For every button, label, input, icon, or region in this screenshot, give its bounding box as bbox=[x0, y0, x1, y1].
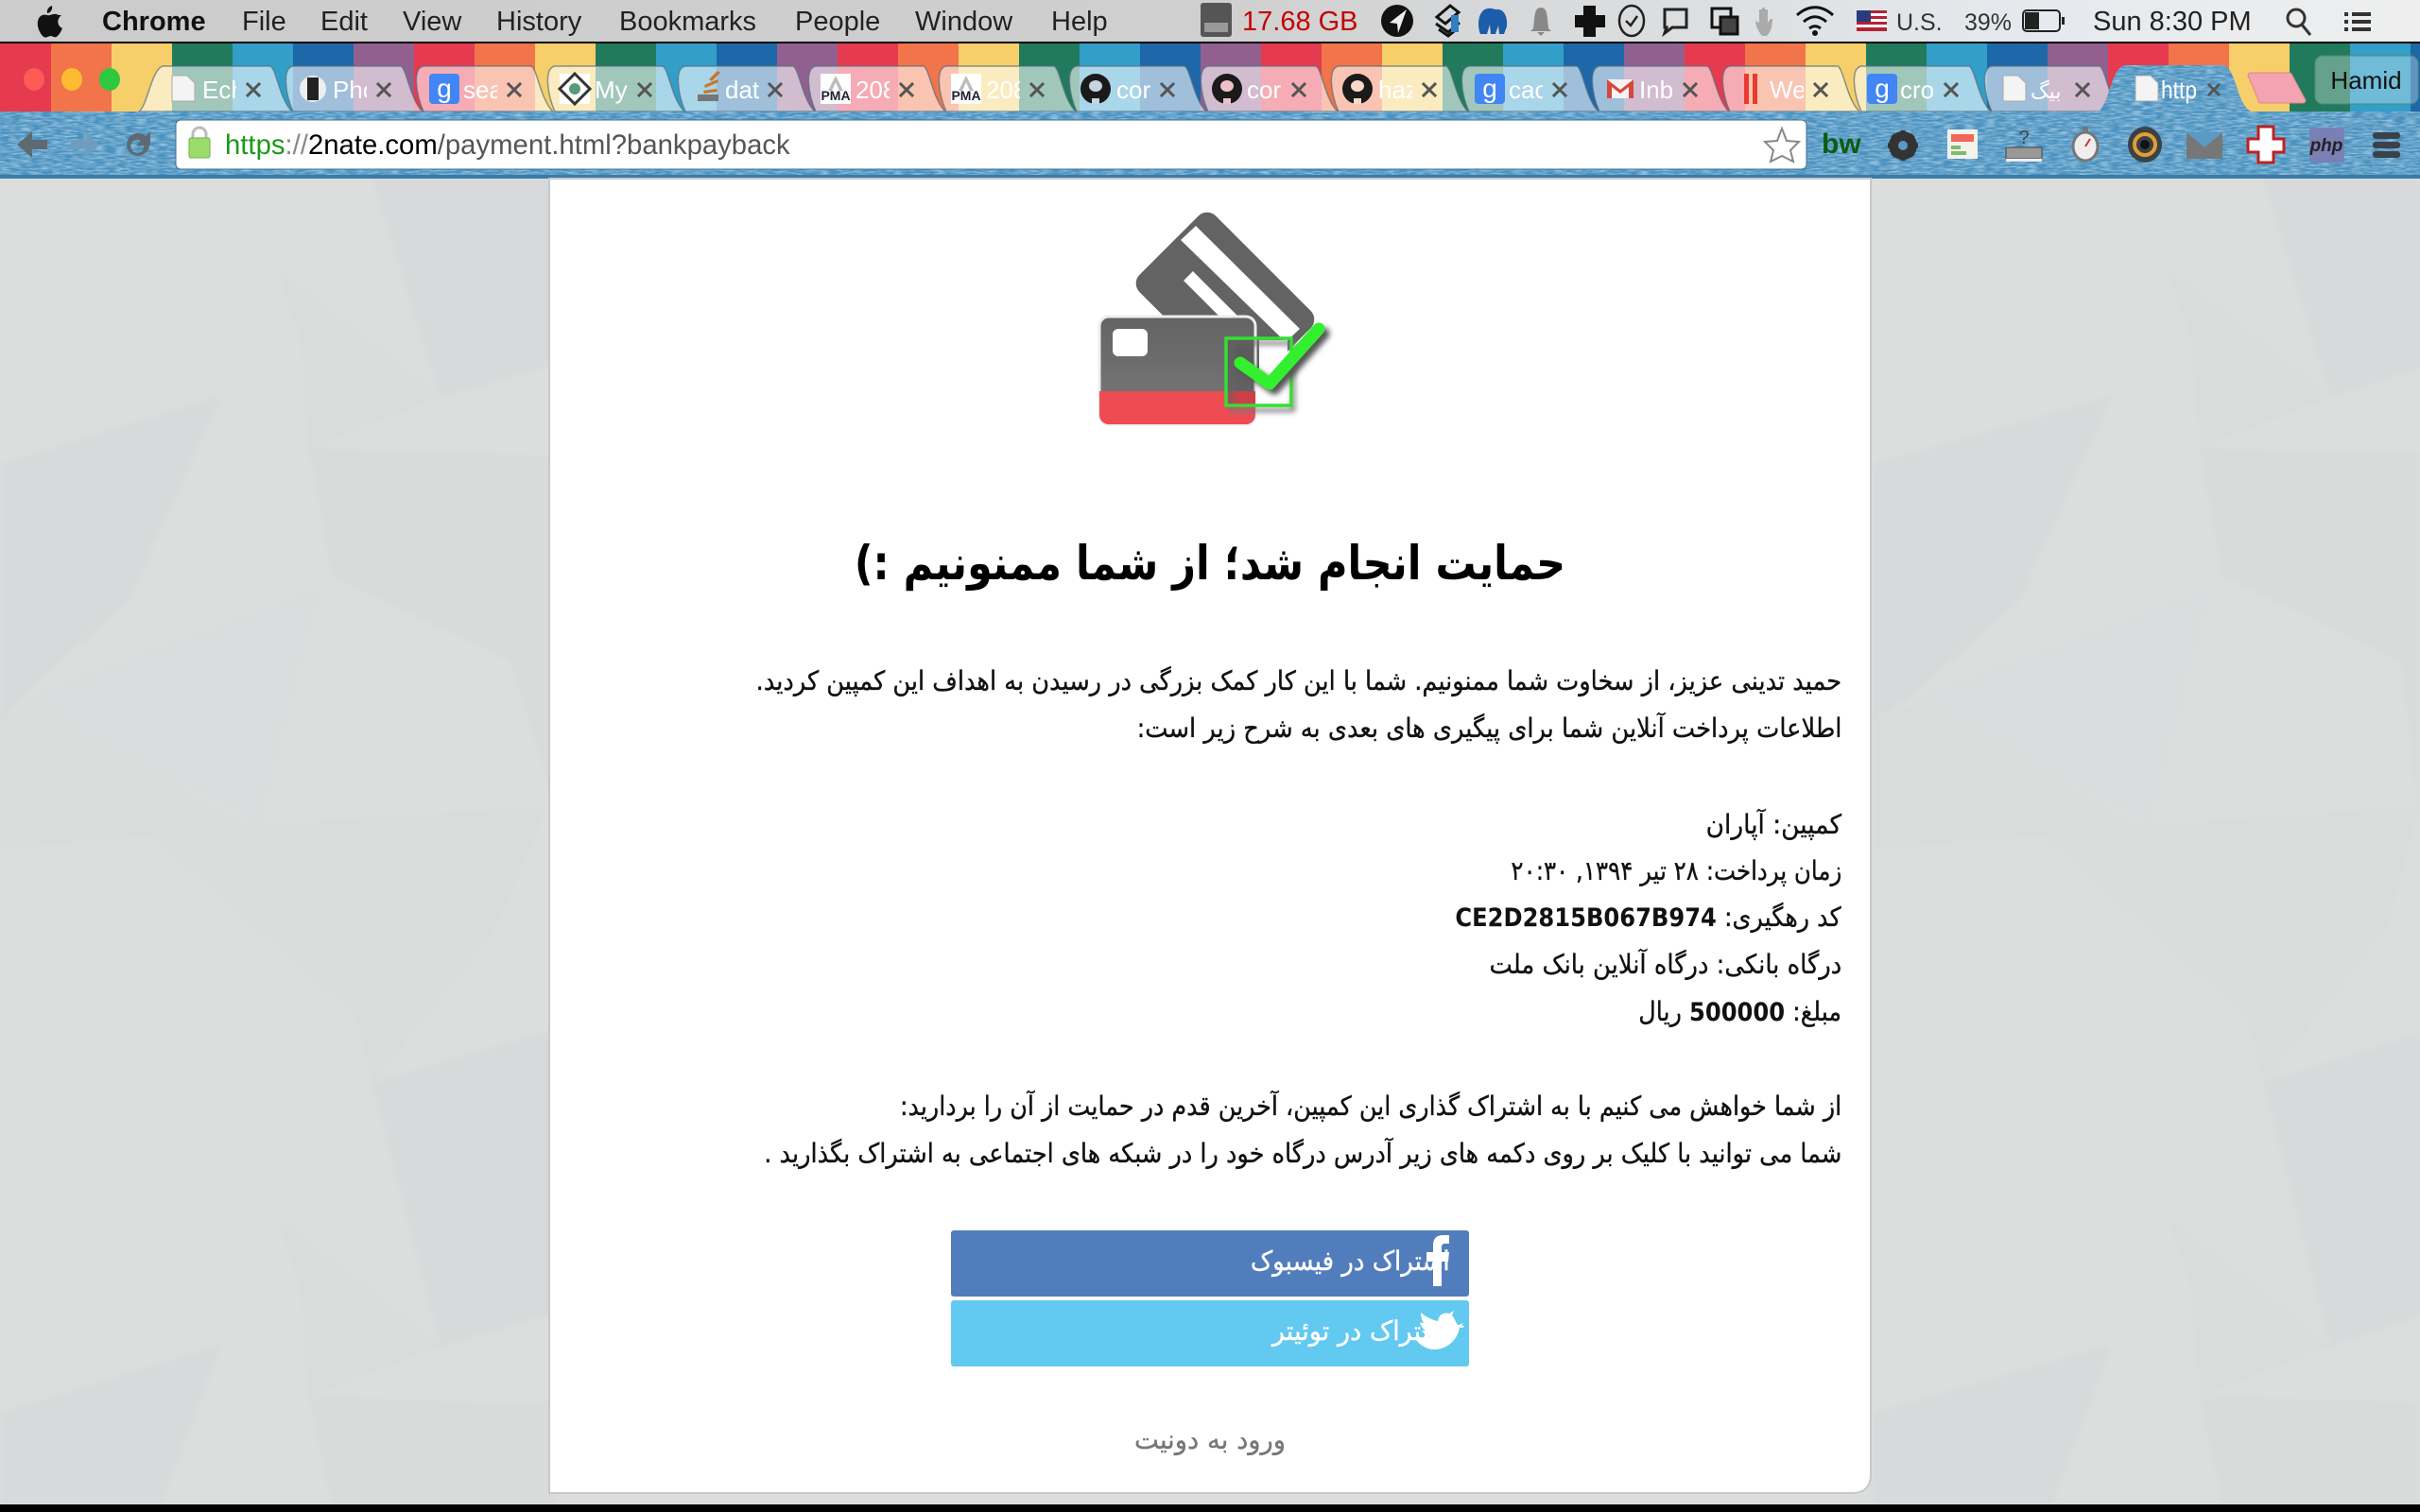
tab favicons: g bbox=[437, 74, 452, 103]
icon: US flag bbox=[1857, 10, 1887, 31]
icon: stopwatch bbox=[2073, 127, 2098, 161]
button: share on twitter bbox=[951, 1300, 1469, 1366]
icon: lens bbox=[2128, 127, 2162, 163]
text: menu items: View bbox=[403, 7, 462, 37]
tab labels: Pho bbox=[333, 76, 376, 104]
active tab favicon bbox=[2135, 76, 2158, 101]
text: disk free: 17.68 GB bbox=[1242, 7, 1358, 37]
rainbow tab strip bbox=[0, 43, 2420, 112]
icon: menu bbox=[2373, 132, 2400, 158]
white content panel bbox=[549, 179, 1871, 1493]
icon: wifi bbox=[1797, 8, 1833, 34]
icon: envelope bbox=[2187, 132, 2222, 159]
white area behind check box bbox=[1259, 340, 1288, 402]
icon: telegram bbox=[1381, 5, 1413, 37]
icon: inbox question: ? bbox=[2018, 128, 2030, 148]
button: share on facebook bbox=[951, 1230, 1469, 1297]
tab labels: We bbox=[1770, 76, 1806, 104]
icon: notification list bbox=[2344, 12, 2371, 31]
tab labels: 208 bbox=[856, 76, 896, 104]
tab row bbox=[139, 66, 2121, 112]
bottom edge bbox=[0, 1504, 2420, 1512]
tab labels: 208 bbox=[986, 76, 1027, 104]
check mark bbox=[1240, 329, 1323, 388]
icon: elephant bbox=[1478, 9, 1507, 34]
tab labels: cor bbox=[1116, 76, 1150, 104]
icon: copy arrows bbox=[1712, 9, 1737, 34]
text: menu items: History bbox=[496, 7, 582, 37]
detail: amount: مبلغ: 500000 ریال bbox=[1638, 996, 1841, 1027]
active tab close bbox=[2208, 84, 2220, 95]
icon: php bbox=[2309, 128, 2344, 163]
detail: tracking code: کد رهگیری: CE2D2815B067B974 bbox=[1456, 902, 1841, 933]
icon: reload bbox=[127, 131, 150, 156]
tab labels bbox=[204, 79, 2060, 104]
icon: gear bbox=[1888, 130, 1918, 161]
detail: payment time: زمان پرداخت: ۲۸ تیر ۱۳۹۴, ۲۰:۳۰ bbox=[1511, 855, 1841, 886]
tab labels: haz bbox=[1378, 76, 1418, 104]
text: menu items: File bbox=[242, 7, 286, 37]
icon: facebook f bbox=[1426, 1235, 1449, 1286]
icon: php: php bbox=[2309, 136, 2342, 156]
heading: حمایت انجام شد؛ از شما ممنونیم :) bbox=[855, 536, 1565, 591]
text: menu items: Bookmarks bbox=[619, 7, 756, 37]
icon: chat bbox=[1665, 9, 1686, 33]
front card bbox=[1099, 317, 1255, 424]
icon: disk bbox=[1201, 3, 1232, 37]
paragraph: info intro: اطلاعات پرداخت آنلاین شما برای پیگیری های بعدی به شرح زیر است: bbox=[1136, 713, 1841, 744]
detail: gateway: درگاه بانکی: درگاه آنلاین بانک ملت bbox=[1489, 949, 1841, 980]
tab favicons bbox=[172, 71, 2026, 104]
icon: forward arrow bbox=[71, 131, 99, 158]
text: status items: 39% bbox=[1964, 9, 2012, 36]
profile button: Hamid bbox=[2330, 66, 2402, 94]
active tab label: http bbox=[2161, 76, 2197, 104]
text: facebook label: اشتراک در فیسبوک bbox=[1251, 1246, 1450, 1277]
text: menu items: People bbox=[795, 7, 880, 37]
text: menu items: Edit bbox=[320, 7, 368, 37]
tab favicons: PMA bbox=[821, 88, 851, 103]
detail: campaign: کمپین: آپاران bbox=[1706, 809, 1841, 840]
extension icons bbox=[1822, 127, 2400, 163]
icon: bell bbox=[1530, 8, 1551, 36]
text: clock: Sun 8:30 PM bbox=[2093, 7, 2252, 37]
toolbar bbox=[0, 65, 2420, 179]
window top edge bbox=[0, 42, 2420, 43]
tab close buttons bbox=[248, 84, 2088, 95]
menu bar bbox=[0, 0, 2420, 42]
profile button bbox=[2315, 56, 2418, 104]
text: menu items: Help bbox=[1051, 7, 1108, 37]
icon: bw: bw bbox=[1822, 129, 1861, 160]
tab favicons: g bbox=[1875, 74, 1890, 103]
icon: clock check bbox=[1619, 6, 1644, 36]
text: status items bbox=[1896, 9, 2012, 36]
address bar bbox=[176, 120, 1806, 169]
icon: red cross bbox=[2248, 127, 2284, 163]
tab labels: dat bbox=[725, 76, 760, 104]
icon: star bbox=[1765, 129, 1799, 162]
window traffic lights bbox=[24, 68, 120, 91]
text: Chrome: Chrome bbox=[102, 7, 206, 37]
tab labels: بیگ bbox=[2031, 79, 2061, 103]
icon: battery bbox=[2023, 10, 2065, 31]
icon: lock bbox=[189, 128, 210, 158]
icon: stack bbox=[1436, 6, 1460, 36]
tab favicons: PMA bbox=[951, 88, 981, 103]
new tab button bbox=[2248, 73, 2306, 103]
icon: note bbox=[1947, 129, 1978, 159]
tab labels: Ech bbox=[202, 76, 245, 104]
text: status items: U.S. bbox=[1896, 9, 1943, 36]
paragraph: share instructions: شما می توانید با کلیک بر روی دکمه های زیر آدرس درگاه خود را در شبکه های اجتماعی به اشتراک بگذارید . bbox=[764, 1138, 1841, 1169]
tab labels: cor bbox=[1247, 76, 1281, 104]
icon: twitter bird bbox=[1416, 1311, 1464, 1349]
tab labels: sea bbox=[463, 76, 503, 104]
icon: back arrow bbox=[17, 131, 47, 158]
text: menu items bbox=[242, 7, 1108, 37]
icon: credit cards with check bbox=[1099, 207, 1323, 424]
icon: inbox question bbox=[2006, 128, 2042, 162]
paragraph: share request: از شما خواهش می کنیم با به اشتراک گذاری این کمپین، آخرین قدم در حمایت از آن را بردارید: bbox=[900, 1091, 1841, 1122]
text: twitter label: اشتراک در توئیتر bbox=[1272, 1315, 1450, 1347]
icon: search bbox=[2288, 9, 2310, 35]
icon: hand bbox=[1755, 8, 1772, 36]
paragraph: thanks: حمید تدینی عزیز، از سخاوت شما ممنونیم. شما با این کار کمک بزرگی در رسیدن به اهداف این کمپین کردید. bbox=[756, 665, 1841, 696]
tab labels: My bbox=[595, 76, 628, 104]
tab labels: cro bbox=[1900, 76, 1934, 104]
back card bbox=[1131, 207, 1320, 396]
tab favicons: g bbox=[1482, 74, 1497, 103]
link: login to donate: ورود به دونیت bbox=[1134, 1424, 1286, 1455]
text: url: https://2nate.com/payment.html?bankpayback bbox=[225, 129, 790, 161]
tab labels: cac bbox=[1509, 76, 1547, 104]
check box bbox=[1226, 338, 1293, 410]
icon: black cross bbox=[1575, 6, 1605, 37]
text: menu items: Window bbox=[915, 7, 1013, 37]
icon: apple logo bbox=[38, 6, 62, 38]
tab labels: Inb bbox=[1639, 76, 1673, 104]
